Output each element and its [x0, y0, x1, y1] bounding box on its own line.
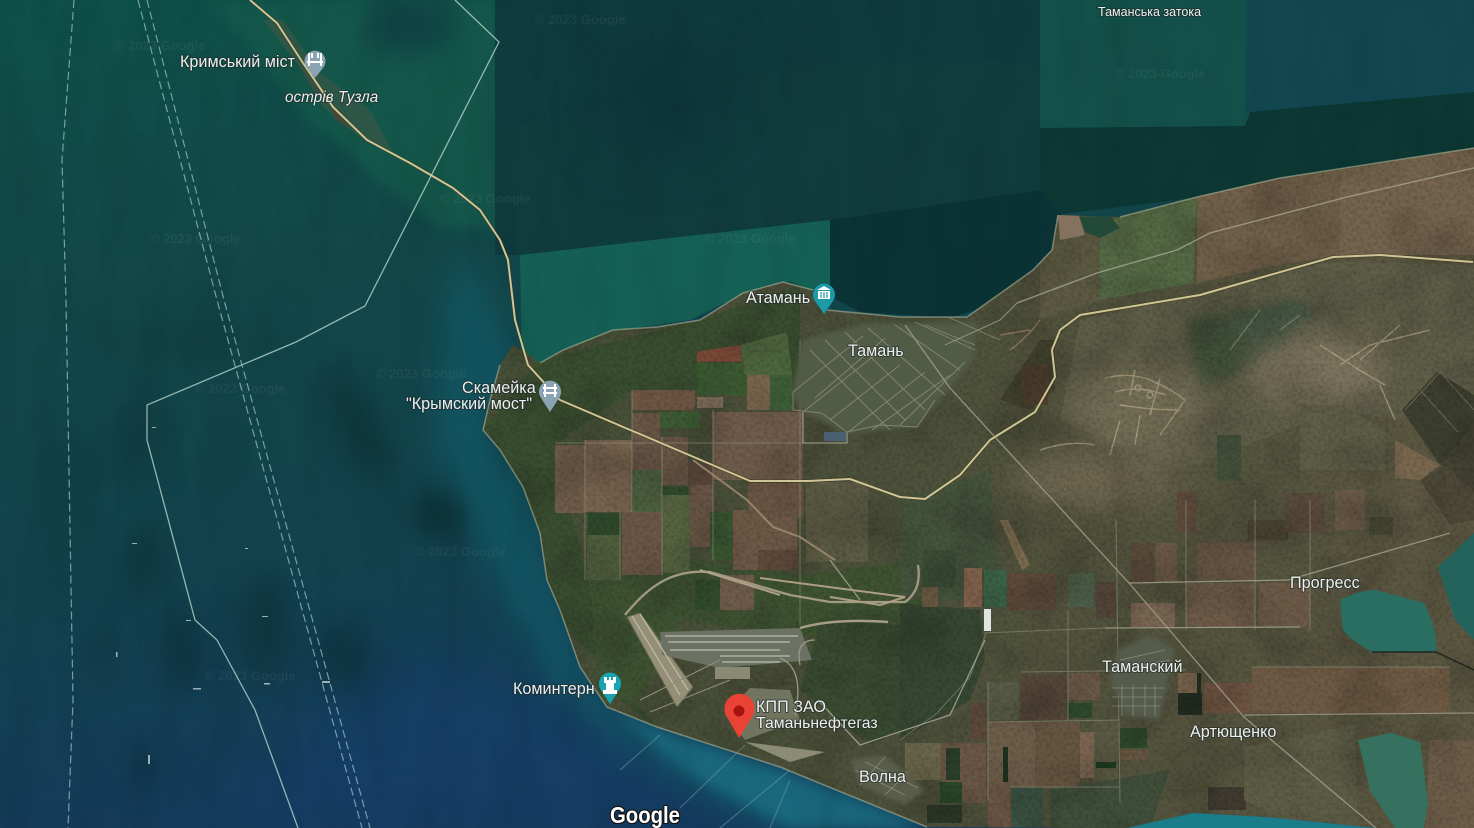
- roads on land: [693, 168, 1474, 828]
- label: Скамейка Крымский мост: "Крымский мост": [406, 395, 532, 413]
- fields: diagonal plots: [1395, 372, 1474, 525]
- icon: museum pin: [813, 284, 835, 314]
- map watermarks: © 2023 Google: [535, 12, 626, 27]
- southern bay: [1127, 813, 1376, 828]
- oil terminal: [625, 560, 991, 762]
- field tracks: [555, 340, 1450, 803]
- shallow coastal water: [436, 250, 960, 828]
- quarry scars: [1000, 310, 1430, 455]
- peninsula land: [483, 148, 1474, 828]
- map watermarks: © 2023 Google: [440, 191, 530, 206]
- land: northern strip and hills: [1000, 148, 1474, 508]
- map watermarks: © 2023 Google: [115, 38, 206, 53]
- map watermarks: © 2023 Google: [376, 366, 466, 381]
- Taman town: [792, 318, 1000, 443]
- Crimean bridge and Tuzla island: [250, 0, 1473, 499]
- icon: bridge pin: [304, 51, 325, 78]
- red location marker: [724, 694, 755, 738]
- land: green western belt: [483, 285, 800, 730]
- map watermarks: © 2023 Google: [705, 231, 796, 246]
- label: КПП ЗАО Таманьнефтегаз: КПП ЗАО: [756, 698, 826, 716]
- icon: bench pin: [539, 381, 561, 412]
- map watermarks: © 2023 Google: [415, 544, 506, 559]
- label: Кримський міст: Кримський міст: [180, 53, 296, 71]
- map watermarks: [115, 12, 1206, 683]
- ships at anchor: [116, 427, 330, 764]
- label: острів Тузла: острів Тузла: [285, 89, 378, 106]
- lakes: [1058, 213, 1474, 828]
- label: Таманский: Таманский: [1102, 658, 1182, 676]
- label: Артющенко: Артющенко: [1190, 723, 1276, 741]
- Tuzla shallows: [210, 0, 498, 228]
- label: Скамейка Крымский мост: [406, 379, 536, 413]
- fields: central brown block: [555, 332, 868, 610]
- map watermarks: © 2023 Google: [150, 231, 240, 246]
- label: Коминтерн: Коминтерн: [513, 680, 595, 698]
- northern bay patches: [495, 0, 1474, 372]
- map watermarks: © 2023 Google: [205, 668, 296, 683]
- label: КПП ЗАО Таманьнефтегаз: [756, 698, 878, 732]
- label: КПП ЗАО Таманьнефтегаз: Таманьнефтегаз: [756, 715, 878, 732]
- Volna and Tamansky villages: [850, 635, 1175, 805]
- land texture: [519, 148, 1474, 828]
- label: Тамань: Тамань: [848, 342, 904, 360]
- map watermarks: © 2023 Google: [1115, 66, 1206, 81]
- label: Атамань: Атамань: [746, 289, 810, 307]
- map watermarks: © 2023 Google: [195, 381, 286, 396]
- label: Скамейка Крымский мост: Скамейка: [462, 379, 536, 397]
- shipping lanes: [62, 0, 370, 828]
- shoreline: [483, 148, 1474, 827]
- label: Таманська затока: Таманська затока: [1098, 5, 1201, 19]
- piers: [620, 735, 790, 828]
- label: Волна: Волна: [859, 768, 906, 786]
- maritime boundary: [147, 0, 499, 828]
- fields: eastern patchwork: [900, 480, 1474, 828]
- icon: tower pin: [599, 673, 621, 704]
- Google logo: Google: [610, 802, 680, 828]
- label: Прогресс: Прогресс: [1290, 574, 1360, 592]
